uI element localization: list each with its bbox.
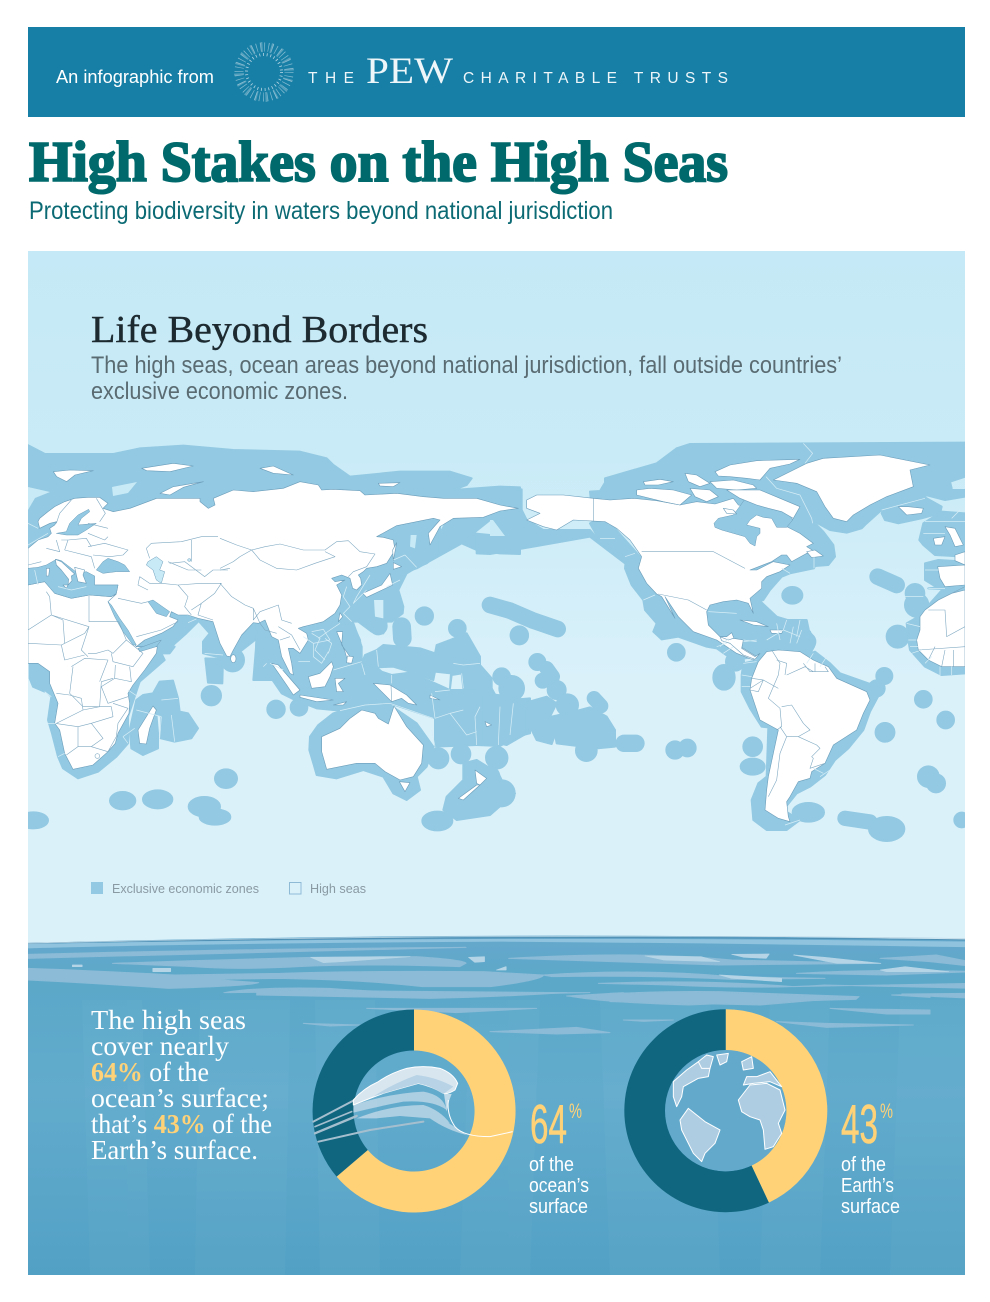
intro text: The high seas, ocean areas beyond national jurisdiction, fall outside countries’ <box>91 352 842 379</box>
Canadian Arctic islands <box>637 459 823 633</box>
exclusive economic zones: arctic and remote Indian Ocean <box>19 445 520 828</box>
summary text: that’s 43% of the <box>91 1109 272 1139</box>
legend: exclusive economic zones: Exclusive economic zones <box>112 881 259 896</box>
summary text: ocean’s surface; <box>91 1083 269 1113</box>
exclusive economic zones: South America and South Atlantic <box>700 620 904 841</box>
country borders: Europe, west Asia and Africa <box>28 498 228 755</box>
subtitle: Protecting biodiversity in waters beyond national jurisdiction <box>29 197 613 225</box>
intro text: exclusive economic zones. <box>91 378 348 405</box>
intro text <box>92 356 841 399</box>
Hudson Bay <box>714 495 793 546</box>
caption: of the Earth's surface: Earth’s <box>841 1175 894 1197</box>
Greenland <box>773 455 930 522</box>
land: Africa and inland seas of Europe <box>28 498 228 769</box>
land: northwest Africa, Iberia, Britain and Iceland <box>882 498 965 675</box>
caption: of the Earth's surface <box>841 1154 900 1218</box>
summary text: 64% of the <box>91 1057 209 1087</box>
logotype: CHARITABLE TRUSTS <box>463 70 728 87</box>
ocean illustration <box>27 936 975 1275</box>
summary text: cover nearly <box>91 1031 230 1061</box>
icon: breaking wave <box>313 1067 513 1142</box>
country borders: east Asia <box>220 538 417 660</box>
legend: exclusive economic zones <box>91 882 258 894</box>
panel: life beyond borders <box>19 251 975 1275</box>
logotype: PEW <box>366 51 453 92</box>
inland seas <box>28 509 170 652</box>
caption: of the ocean's surface: ocean’s <box>529 1175 589 1197</box>
logotype: THE <box>308 70 354 87</box>
icon: Pew sunburst logo <box>239 47 289 97</box>
stat: 64 percent <box>532 1104 582 1144</box>
caption: of the Earth's surface: of the <box>841 1154 886 1176</box>
header banner <box>28 27 965 117</box>
label: An infographic from: An infographic from <box>56 66 214 87</box>
islands <box>272 632 492 800</box>
caption: of the ocean's surface: of the <box>529 1154 574 1176</box>
islands of the Arctic and Japan <box>53 463 402 663</box>
caption: of the ocean's surface <box>530 1156 588 1213</box>
caption: of the ocean's surface: surface <box>529 1196 588 1218</box>
world map <box>19 443 969 841</box>
land: South and Central America <box>720 620 870 825</box>
land: North America <box>527 443 930 660</box>
stat: 64 percent: 64 <box>530 1093 567 1155</box>
exclusive economic zones: east Asia <box>221 517 440 680</box>
summary text: Earth’s surface. <box>91 1135 258 1165</box>
Australia <box>322 706 423 780</box>
exclusive economic zones: remaining Atlantic islands <box>876 691 969 827</box>
stat: 43 percent: 43 <box>841 1093 878 1155</box>
exclusive economic zones: Africa and south Asia <box>30 612 226 778</box>
title: High Stakes on the High Seas <box>29 131 728 194</box>
stat: 64 percent: % <box>569 1100 582 1123</box>
summary text <box>91 1005 272 1165</box>
heading: Life Beyond Borders: Life Beyond Borders <box>91 309 428 351</box>
legend: high seas: High seas <box>310 881 366 896</box>
donut chart: 64 percent of ocean surface <box>313 1010 516 1212</box>
land: southeast Asia, Australia and New Zealand <box>263 629 513 800</box>
land: Eurasia <box>28 463 518 675</box>
legend <box>91 882 366 896</box>
donut chart: 43 percent of Earth surface <box>624 1009 827 1212</box>
exclusive economic zones: southeast Asia and Oceania <box>256 620 530 830</box>
high seas gaps in the arctic <box>28 482 505 536</box>
stat: 43 percent: % <box>880 1100 893 1123</box>
logotype <box>308 51 728 92</box>
caption: of the Earth's surface: surface <box>841 1196 900 1218</box>
icon: globe <box>665 1050 786 1171</box>
exclusive economic zones: North America and Caribbean <box>590 443 965 661</box>
summary text: The high seas <box>91 1005 246 1035</box>
exclusive economic zones: northeast Atlantic <box>878 490 965 675</box>
exclusive economic zones: North Pacific and Polynesia <box>477 487 696 806</box>
